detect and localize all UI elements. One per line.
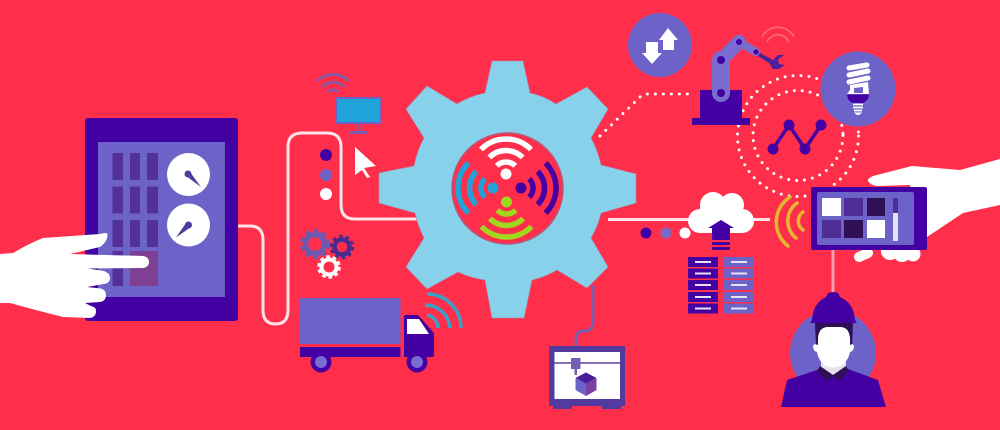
icon: up/down arrows	[628, 13, 692, 77]
bulb collar	[847, 94, 869, 103]
worker body	[781, 369, 886, 407]
worker neck	[821, 355, 846, 376]
handheld screen	[817, 192, 914, 245]
icon: 3D printer	[549, 346, 625, 409]
icon: pointing hand	[0, 233, 149, 318]
icon: robot arm	[692, 27, 794, 125]
icon: gears	[302, 231, 352, 277]
gear centre disc	[452, 133, 563, 244]
faint wifi	[762, 27, 794, 42]
wifi signal: green	[482, 196, 532, 237]
gear large	[302, 231, 328, 257]
arm segments	[712, 60, 730, 93]
dotted orbits	[738, 76, 858, 196]
bulb coils	[849, 65, 868, 82]
tablet body	[85, 118, 238, 321]
down arrow	[642, 42, 662, 64]
server slots	[695, 261, 747, 310]
icon: cloud upload	[688, 192, 754, 250]
cab	[404, 315, 434, 357]
control blocks	[112, 153, 158, 286]
upload arrow	[708, 220, 734, 250]
worker collar	[817, 366, 849, 381]
printer feet	[553, 406, 621, 409]
right connector line	[608, 218, 770, 221]
cargo box	[300, 298, 400, 344]
print head	[571, 358, 580, 375]
truck wifi	[425, 294, 461, 328]
thumb	[859, 253, 868, 257]
icon: right hand	[859, 159, 1000, 262]
up arrow	[659, 28, 678, 50]
server column dark	[688, 257, 718, 314]
printer rail	[554, 362, 620, 364]
worker backdrop	[790, 310, 876, 396]
cloud	[688, 192, 754, 233]
handheld body	[811, 187, 927, 250]
server stacks	[688, 257, 754, 314]
status dots right	[640, 228, 690, 238]
robot base	[692, 90, 750, 125]
handheld cells	[822, 198, 885, 238]
icon: delivery truck	[300, 294, 461, 372]
highlighted block	[130, 251, 158, 286]
worker face	[813, 327, 854, 368]
worker helmet	[810, 292, 857, 323]
printer frame	[549, 346, 625, 406]
left connector line	[238, 133, 418, 324]
server column light	[724, 257, 754, 314]
icon: worker with helmet	[781, 292, 886, 407]
status dots left	[320, 149, 332, 200]
chassis	[300, 347, 400, 357]
palm and arm	[868, 159, 1000, 240]
dial bottom	[167, 204, 210, 246]
printed cube	[576, 372, 596, 396]
icon: light bulb	[820, 52, 896, 126]
gear white	[319, 257, 339, 277]
worker hair	[815, 323, 853, 347]
tablet screen	[98, 142, 225, 297]
wifi signal: white	[481, 139, 531, 180]
wifi signal: blue	[458, 163, 498, 213]
handheld slider	[893, 198, 898, 241]
cab window	[407, 319, 429, 334]
panel: handheld tablet	[811, 187, 927, 250]
gear medium	[332, 236, 352, 258]
printer window	[554, 352, 620, 399]
gear body	[379, 61, 636, 318]
fingers	[881, 242, 899, 260]
monitor stand	[349, 124, 368, 134]
wrench	[758, 53, 785, 69]
bulb threads	[853, 104, 863, 110]
bulb neck	[847, 82, 869, 94]
wifi signal: purple	[516, 163, 556, 213]
bulb tip	[854, 112, 862, 115]
arm joints	[717, 39, 758, 97]
icon: cursor arrow	[355, 147, 376, 178]
wifi arcs	[317, 75, 349, 92]
dial top	[167, 153, 210, 196]
wheels	[310, 352, 428, 372]
icon: monitor with wifi	[317, 75, 381, 134]
panel: control tablet	[85, 118, 238, 321]
connector to worker	[832, 250, 834, 294]
panel: gear	[379, 61, 636, 318]
line chart icon	[768, 120, 826, 154]
printer cable	[576, 285, 593, 360]
monitor screen	[336, 98, 381, 123]
dotted path to robot	[600, 94, 692, 136]
yellow wifi signal	[776, 197, 803, 246]
